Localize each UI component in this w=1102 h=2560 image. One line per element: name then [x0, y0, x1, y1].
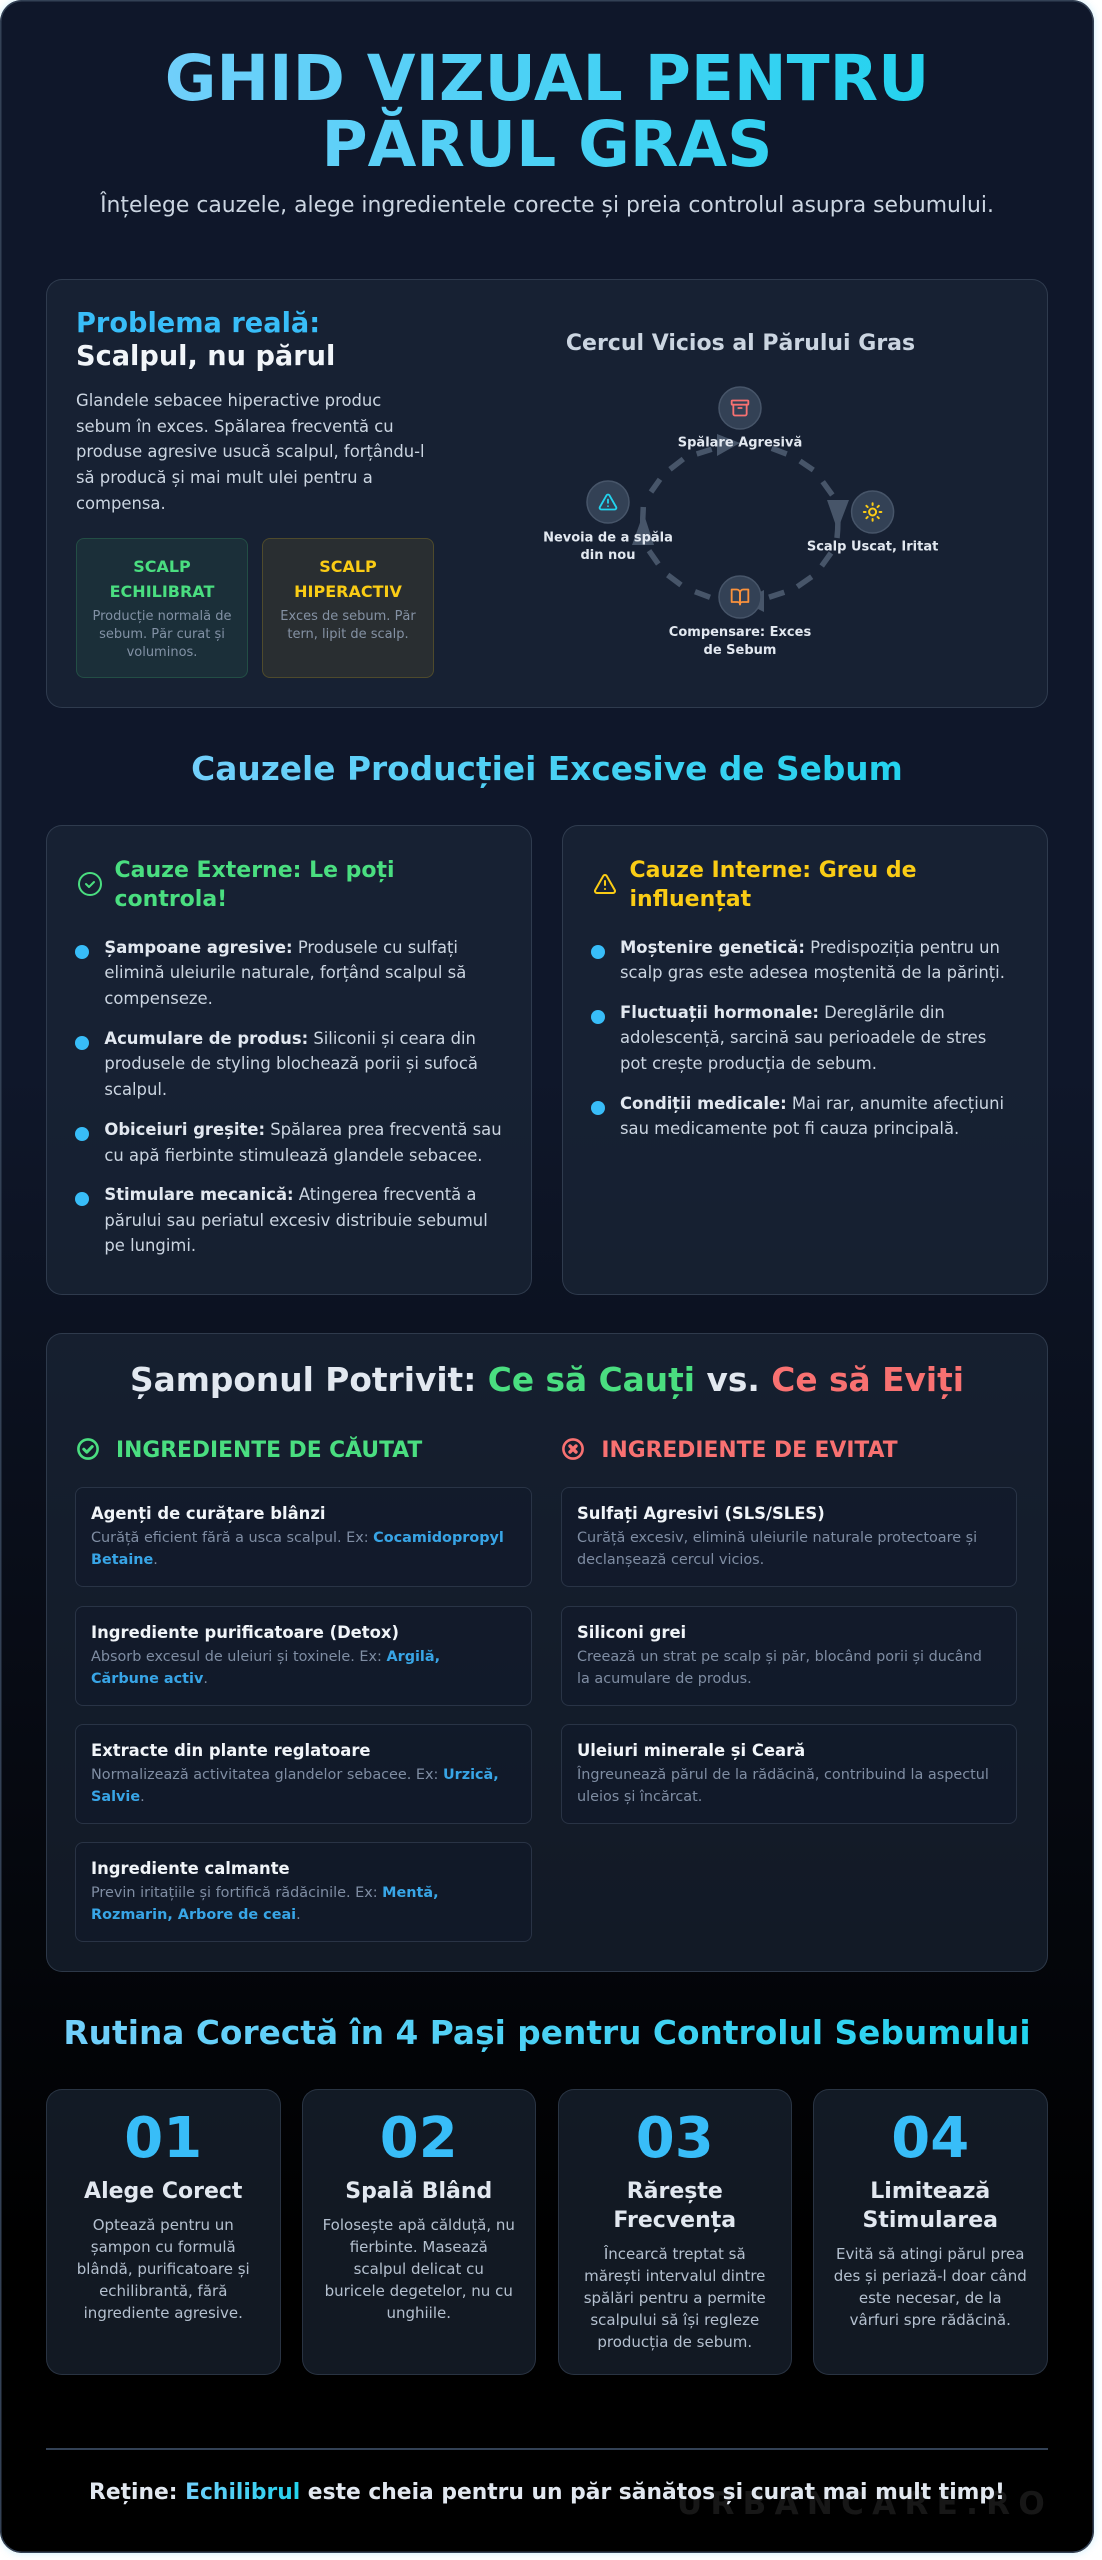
step 4: Limitează	[870, 2179, 990, 2204]
node: aggressive washing: Spălare Agresivă	[678, 436, 802, 451]
text: product buildup: produsele de styling blochează porii și sufocă	[104, 1054, 478, 1073]
text: medical conditions	[620, 1094, 1004, 1138]
node: dry irritated scalp: Scalp Uscat, Iritat	[807, 540, 938, 555]
step 3: producția de sebum.	[597, 2333, 752, 2351]
text: genetics	[620, 938, 1005, 982]
icon: warning triangle	[594, 874, 616, 894]
card: silicones: Siliconi grei	[577, 1623, 686, 1642]
card: balanced scalp: ECHILIBRAT	[110, 582, 214, 601]
card: gentle cleansers	[75, 1487, 532, 1587]
step 1: 01	[124, 2106, 202, 2171]
heading: external causes: Cauze Externe: Le poți	[114, 858, 395, 883]
text: aggressive shampoos: Șampoane agresive: Produsele cu sulfați	[104, 938, 458, 957]
card: hyperactive scalp: HIPERACTIV	[294, 582, 402, 601]
step 2: Spală Blând	[345, 2179, 492, 2204]
dashed ring with arrows	[632, 434, 849, 612]
text: problem description: sebum în exces. Spălarea frecventă cu	[76, 417, 394, 436]
card: detox ingredients: Ingrediente purificatoare (Detox)	[91, 1623, 399, 1642]
title	[147, 46, 947, 178]
card: mineral oils	[561, 1724, 1017, 1824]
text: hormones: Fluctuații hormonale: Dereglările din	[620, 1003, 945, 1022]
diagram: vicious circle	[543, 331, 938, 658]
heading: internal causes: Cauze Interne: Greu de	[630, 858, 917, 883]
step 1: Optează pentru un	[93, 2216, 234, 2234]
card: balanced scalp: voluminos.	[127, 645, 197, 660]
node: compensation: Compensare: Exces	[669, 625, 811, 640]
step 2: Folosește apă călduță, nu	[323, 2216, 515, 2234]
bullet	[75, 1036, 89, 1050]
heading: ingredients to avoid: INGREDIENTE DE EVITAT	[601, 1438, 898, 1463]
card: hyperactive scalp: Exces de sebum. Păr	[280, 609, 416, 624]
step 1: ingrediente agresive.	[84, 2304, 243, 2322]
step 3: Încearcă treptat să	[604, 2245, 746, 2263]
text: problem description: Glandele sebacee hiperactive produc	[76, 391, 381, 410]
card: sulfates: Curăță excesiv, elimină uleiurile naturale protectoare și	[577, 1530, 977, 1546]
step 4: Stimularea	[862, 2208, 998, 2233]
node: aggressive washing	[678, 387, 802, 451]
step 4: Evită să atingi părul prea	[836, 2245, 1024, 2263]
text: problem description: produse agresive usucă scalpul, forțându-l	[76, 442, 425, 461]
text: product buildup: Acumulare de produs: Siliconii și ceara din	[104, 1029, 476, 1048]
text: hormones	[620, 1003, 986, 1073]
panel: external causes	[46, 825, 532, 1295]
step 3: scalpului să își regleze	[590, 2311, 759, 2329]
card: hyperactive scalp: SCALP	[319, 557, 377, 576]
step 4: este necesar, de la	[859, 2289, 1002, 2307]
heading: vicious circle: Cercul Vicios al Părului Gras	[566, 331, 915, 356]
card: plant extracts	[75, 1724, 532, 1824]
card: hyperactive scalp: tern, lipit de scalp.	[287, 627, 409, 642]
text: hormones: pot crește producția de sebum.	[620, 1054, 877, 1073]
card: sulfates: Sulfați Agresivi (SLS/SLES)	[577, 1504, 825, 1523]
bullet	[75, 945, 89, 959]
bullet	[591, 945, 605, 959]
text: aggressive shampoos: compenseze.	[104, 989, 213, 1008]
card: mineral oils: Îngreunează părul de la rădăcină, contribuind la aspectul	[577, 1767, 989, 1783]
heading: external causes	[114, 858, 395, 912]
card: gentle cleansers: Curăță eficient fără a usca scalpul. Ex: Cocamidopropyl	[91, 1530, 504, 1546]
card: plant extracts: Salvie.	[91, 1789, 145, 1805]
step 3: mărești intervalul dintre	[584, 2267, 765, 2285]
heading: real problem: Scalpul, nu părul	[76, 341, 335, 372]
card: hyperactive scalp	[262, 538, 434, 678]
heading: ingredients to look for: INGREDIENTE DE CĂUTAT	[116, 1438, 422, 1463]
text: mechanical stimulation: Stimulare mecanică: Atingerea frecventă a	[104, 1185, 476, 1204]
bullet	[75, 1192, 89, 1206]
title: GHID VIZUAL PENTRU	[165, 42, 929, 115]
text: mechanical stimulation	[104, 1185, 488, 1255]
text: problem description	[76, 391, 425, 513]
icon: x badge	[562, 1438, 584, 1460]
step 2: buricele degetelor, nu cu	[325, 2282, 513, 2300]
node: need to wash again: Nevoia de a spăla	[543, 531, 673, 546]
step 3	[558, 2089, 792, 2375]
bullet	[75, 1127, 89, 1141]
step 3: 03	[636, 2106, 714, 2171]
card: balanced scalp	[76, 538, 248, 678]
node: compensation: de Sebum	[704, 643, 776, 658]
card: detox ingredients: Absorb excesul de uleiuri și toxinele. Ex: Argilă,	[91, 1649, 440, 1665]
text: product buildup: scalpul.	[104, 1080, 167, 1099]
step 4: 04	[891, 2106, 969, 2171]
card: mineral oils: Uleiuri minerale și Ceară	[577, 1741, 805, 1760]
title: PĂRUL GRAS	[321, 108, 773, 181]
card: plant extracts: Normalizează activitatea glandelor sebacee. Ex: Urzică,	[91, 1767, 499, 1783]
step 3: spălări pentru a permite	[584, 2289, 766, 2307]
card: soothing ingredients: Ingrediente calmante	[91, 1859, 290, 1878]
step 4	[813, 2089, 1048, 2375]
footer takeaway: Reține: Echilibrul este cheia pentru un păr sănătos și curat mai mult timp!	[89, 2480, 1005, 2504]
panel: internal causes	[562, 825, 1048, 1295]
step 1: echilibrantă, fără	[99, 2282, 227, 2300]
step 2: fierbinte. Masează	[350, 2238, 488, 2256]
card: silicones: la acumulare de produs.	[577, 1671, 752, 1687]
card: gentle cleansers: Agenți de curățare blânzi	[91, 1504, 326, 1523]
text: problem description: compensa.	[76, 494, 166, 513]
text: mechanical stimulation: părului sau periatul excesiv distribuie sebumul	[104, 1211, 488, 1230]
step 2: unghiile.	[386, 2304, 451, 2322]
card: gentle cleansers: Betaine.	[91, 1552, 158, 1568]
text: product buildup	[104, 1029, 478, 1099]
card: soothing ingredients	[75, 1842, 532, 1942]
text: aggressive shampoos: elimină uleiurile naturale, forțând scalpul să	[104, 963, 466, 982]
card: soothing ingredients: Previn iritațiile și fortifică rădăcinile. Ex: Mentă,	[91, 1885, 439, 1901]
panel: real problem and vicious circle	[46, 279, 1048, 708]
text: bad habits: cu apă fierbinte stimulează glandele sebacee.	[104, 1146, 483, 1165]
card: soothing ingredients: Rozmarin, Arbore de ceai.	[91, 1907, 301, 1923]
watermark: URBANCARE.RO	[677, 2486, 1053, 2522]
panel: shampoo ingredients	[46, 1333, 1048, 1972]
heading: real problem	[76, 308, 335, 372]
step 2	[302, 2089, 536, 2375]
card: plant extracts: Extracte din plante reglatoare	[91, 1741, 371, 1760]
step 1: Alege Corect	[84, 2179, 242, 2204]
step 3: Frecvența	[613, 2208, 736, 2233]
text: bad habits	[104, 1120, 502, 1165]
heading: causes: Cauzele Producției Excesive de Sebum	[191, 750, 903, 788]
node: dry irritated scalp	[807, 491, 938, 555]
step 1: blândă, purificatoare și	[77, 2260, 250, 2278]
text: problem description: să producă și mai mult ulei pentru a	[76, 468, 373, 487]
text: mechanical stimulation: pe lungimi.	[104, 1236, 196, 1255]
card: balanced scalp: SCALP	[133, 557, 191, 576]
text: medical conditions: Condiții medicale: Mai rar, anumite afecțiuni	[620, 1094, 1004, 1113]
heading: routine: Rutina Corectă în 4 Pași pentru Controlul Sebumului	[63, 2014, 1031, 2052]
node: need to wash again: din nou	[581, 548, 635, 563]
node: compensation	[669, 576, 811, 658]
node: need to wash again	[543, 481, 673, 563]
step 4: des și periază-l doar când	[834, 2267, 1027, 2285]
bullet	[591, 1010, 605, 1024]
step 1: șampon cu formulă	[91, 2238, 236, 2256]
text: hormones: adolescență, sarcină sau perioadele de stres	[620, 1028, 986, 1047]
card: mineral oils: uleios și încărcat.	[577, 1789, 702, 1805]
text: aggressive shampoos	[104, 938, 466, 1008]
card: detox ingredients	[75, 1606, 532, 1706]
bullet	[591, 1101, 605, 1115]
step 2: scalpul delicat cu	[354, 2260, 484, 2278]
heading: external causes: controla!	[114, 887, 227, 912]
card: sulfates: declanșează cercul vicios.	[577, 1552, 764, 1568]
heading: internal causes	[630, 858, 917, 912]
card: balanced scalp: sebum. Păr curat și	[99, 627, 225, 642]
text: medical conditions: sau medicamente pot fi cauza principală.	[620, 1119, 959, 1138]
heading: right shampoo: Șamponul Potrivit: Ce să Cauți vs. Ce să Eviți	[130, 1361, 964, 1399]
icon: check circle	[78, 872, 102, 896]
step 3: Rărește	[627, 2179, 723, 2204]
heading: real problem: Problema reală:	[76, 308, 320, 339]
card: detox ingredients: Cărbune activ.	[91, 1671, 208, 1687]
heading: internal causes: influențat	[630, 887, 751, 912]
step 2: 02	[380, 2106, 458, 2171]
text: genetics: scalp gras este adesea moștenită de la părinți.	[620, 963, 1005, 982]
text: genetics: Moștenire genetică: Predispoziția pentru un	[620, 938, 1000, 957]
step 1	[46, 2089, 280, 2375]
card: balanced scalp: Producție normală de	[92, 609, 232, 624]
card: sulfates	[561, 1487, 1017, 1587]
step 4: vârfuri spre rădăcină.	[850, 2311, 1011, 2329]
text: bad habits: Obiceiuri greșite: Spălarea prea frecventă sau	[104, 1120, 502, 1139]
subtitle: Înțelege cauzele, alege ingredientele corecte și preia controlul asupra sebumului.	[100, 193, 994, 218]
card: silicones: Creează un strat pe scalp și păr, blocând porii și ducând	[577, 1649, 982, 1665]
icon: check badge	[77, 1438, 99, 1460]
card: silicones	[561, 1606, 1017, 1706]
